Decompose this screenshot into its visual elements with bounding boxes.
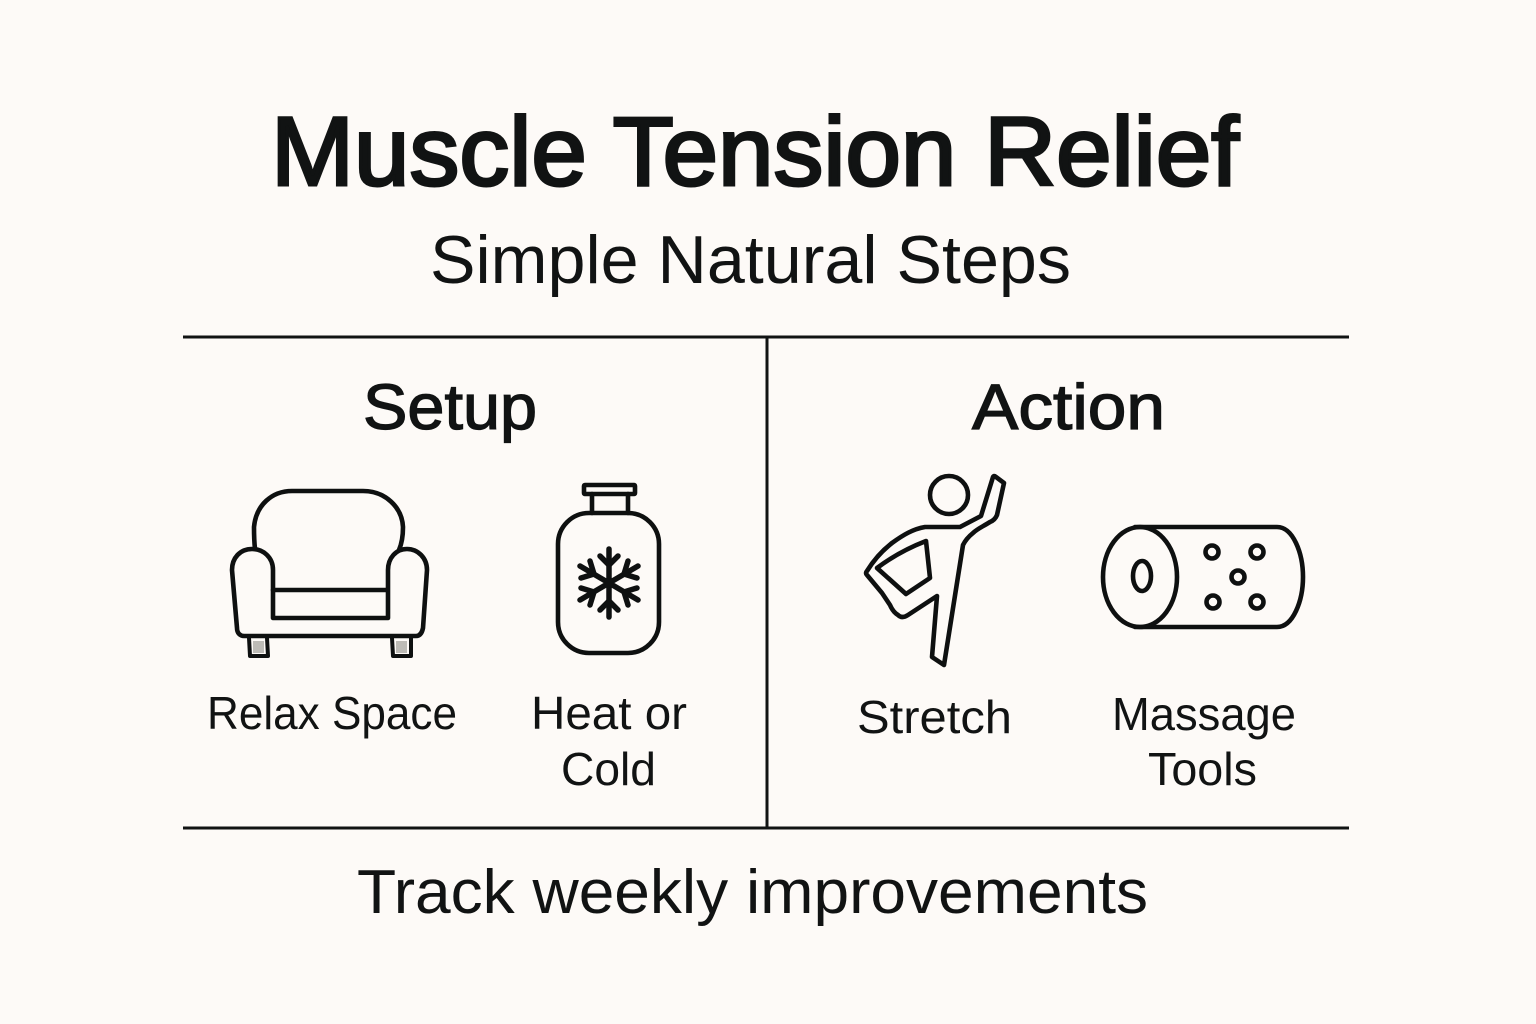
footer note: Track weekly improvements: [357, 858, 1148, 927]
icon: armchair: [232, 491, 427, 656]
title: Muscle Tension Relief: [271, 97, 1240, 206]
icon: cold pack bottle: [558, 485, 659, 653]
icon: massage roller: [1103, 527, 1303, 627]
panel: action: [857, 371, 1303, 795]
heading: setup: Setup: [363, 371, 537, 443]
label: relax space: Relax Space: [207, 687, 457, 739]
heading: action: Action: [972, 371, 1165, 443]
icon: stretching figure: [866, 476, 1004, 665]
label: stretch: Stretch: [857, 691, 1012, 743]
panel: setup: [207, 371, 687, 795]
label: heat or cold: [531, 687, 687, 795]
subtitle: Simple Natural Steps: [430, 222, 1071, 298]
label: heat or cold: Cold: [561, 743, 656, 795]
label: massage tools: [1112, 688, 1296, 795]
label: massage tools: Tools: [1148, 743, 1257, 795]
label: massage tools: Massage: [1112, 688, 1296, 740]
label: heat or cold: Heat or: [531, 687, 687, 739]
